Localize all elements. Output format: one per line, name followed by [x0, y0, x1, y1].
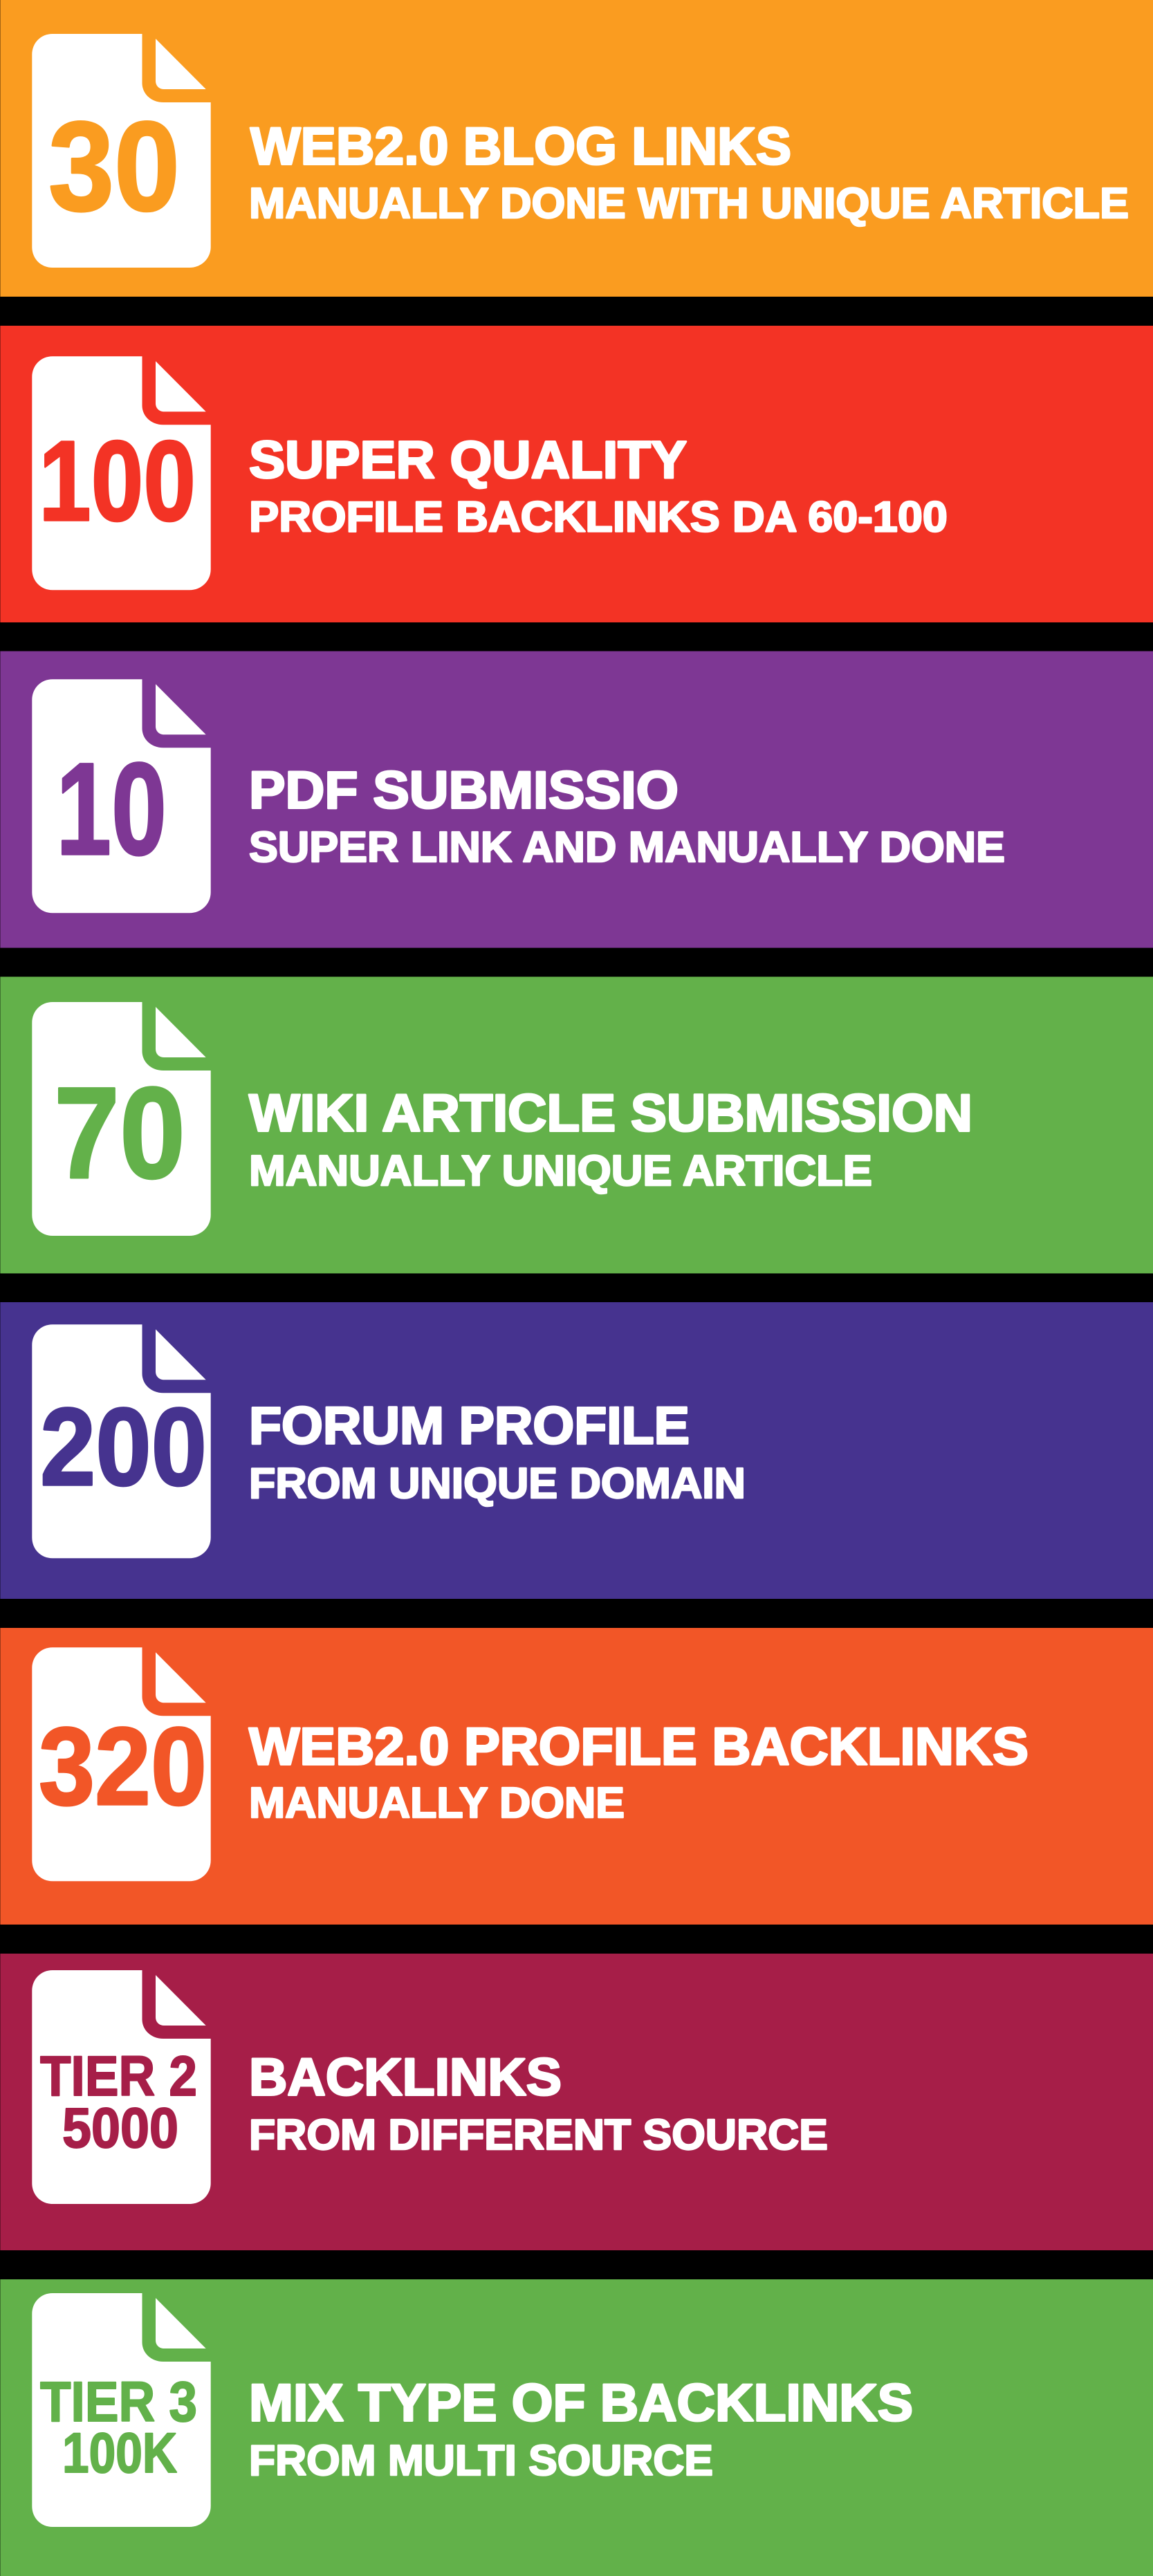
icon: document with tier 2 5000: TIER 2 [40, 2045, 197, 2108]
heading: WEB2.0 PROFILE BACKLINKS [249, 1718, 1029, 1776]
subheading: MANUALLY DONE [249, 1779, 625, 1827]
icon: document with tier 2 5000 [32, 1970, 211, 2204]
heading: SUPER QUALITY [249, 431, 687, 490]
subheading: FROM MULTI SOURCE [249, 2437, 713, 2485]
icon: document with 70: 70 [54, 1060, 185, 1205]
subheading: FROM UNIQUE DOMAIN [249, 1460, 746, 1508]
panel: 70 wiki article submission [0, 976, 1153, 1273]
icon: document with 320 [32, 1647, 211, 1881]
icon: document with 100: 100 [39, 417, 196, 544]
icon: document with 70 [32, 1002, 211, 1236]
panel: 10 pdf submission [0, 651, 1153, 948]
icon: document with 100 [32, 356, 211, 590]
subheading: MANUALLY DONE WITH UNIQUE ARTICLE [249, 180, 1129, 228]
subheading: SUPER LINK AND MANUALLY DONE [249, 824, 1005, 871]
icon: document with 30: 30 [48, 95, 180, 237]
heading: WIKI ARTICLE SUBMISSION [249, 1084, 972, 1142]
heading: WEB2.0 BLOG LINKS [250, 118, 791, 176]
heading: PDF SUBMISSIO [249, 761, 679, 820]
subheading: FROM DIFFERENT SOURCE [249, 2111, 828, 2159]
panel: tier 3 100k mix backlinks [0, 2279, 1153, 2576]
heading: MIX TYPE OF BACKLINKS [249, 2373, 913, 2433]
subheading: PROFILE BACKLINKS DA 60-100 [249, 494, 948, 541]
icon: document with tier 3 100k: TIER 3 [40, 2371, 197, 2434]
icon: document with 200: 200 [40, 1384, 207, 1508]
panel: 200 forum profile [0, 1302, 1153, 1599]
icon: document with 320: 320 [39, 1704, 207, 1828]
panel: 320 web2.0 profile backlinks [0, 1628, 1153, 1925]
heading: FORUM PROFILE [249, 1397, 690, 1455]
panel: 100 super quality [0, 326, 1153, 622]
icon: document with tier 2 5000: 5000 [62, 2097, 178, 2160]
icon: document with 200 [32, 1324, 211, 1558]
icon: document with 10 [32, 679, 211, 913]
icon: document with tier 3 100k: 100K [62, 2422, 177, 2485]
panel: tier 2 5000 backlinks [0, 1954, 1153, 2250]
icon: document with 10: 10 [56, 736, 167, 882]
subheading: MANUALLY UNIQUE ARTICLE [249, 1147, 872, 1195]
icon: document with 30 [32, 34, 211, 268]
heading: BACKLINKS [249, 2048, 562, 2106]
icon: document with tier 3 100k [32, 2293, 211, 2527]
panel: 30 web2.0 blog links [0, 0, 1153, 297]
